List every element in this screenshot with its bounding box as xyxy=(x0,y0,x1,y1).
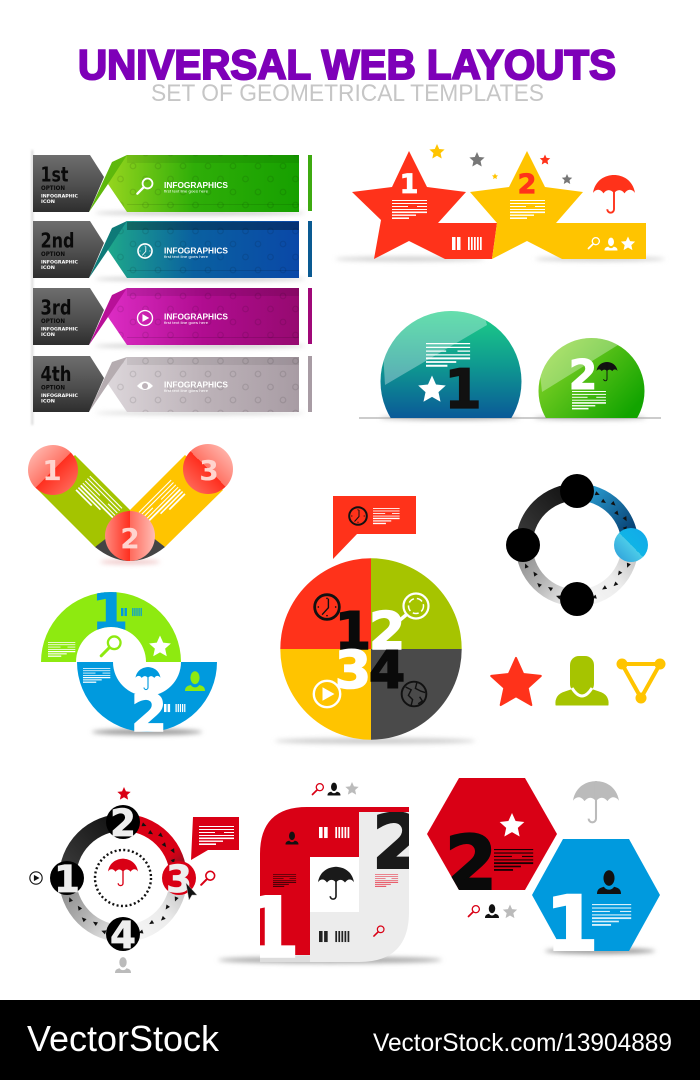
text lines dark xyxy=(494,849,533,871)
dome 1 xyxy=(380,311,522,418)
title: UNIVERSAL WEB LAYOUTS xyxy=(78,41,616,88)
icon: yellow triangle xyxy=(616,658,666,704)
icon: magnifier globe xyxy=(400,594,428,620)
text lines dark xyxy=(273,874,296,887)
red hexagon xyxy=(427,778,557,890)
banner: 4th option: first text line goes here xyxy=(164,389,208,393)
icon: star xyxy=(500,813,524,837)
banner: 3rd option xyxy=(33,288,312,348)
tiny star yellow xyxy=(492,173,498,179)
number 2: 2 xyxy=(369,602,405,662)
banner: 3rd option: ICON xyxy=(41,332,55,338)
banner: 3rd option: OPTION xyxy=(41,318,65,325)
icon: person xyxy=(286,832,298,844)
icon: globe xyxy=(402,682,426,706)
speech bubble xyxy=(333,496,416,559)
number 2: 2 xyxy=(372,798,424,886)
star 1 with ribbon xyxy=(352,151,497,259)
banner: 4th option: INFOGRAPHIC xyxy=(41,393,79,399)
node 2 xyxy=(106,805,140,839)
banner: 1st option: INFOGRAPHIC xyxy=(41,193,79,199)
node top xyxy=(560,474,594,508)
banner: 1st option: first text line goes here xyxy=(164,190,208,194)
node right xyxy=(614,528,648,562)
icon: magnifier xyxy=(201,871,215,885)
icon: star xyxy=(149,636,171,656)
node left xyxy=(506,528,540,562)
text lines yellow arm xyxy=(139,480,186,527)
banner: 4th option: 4th xyxy=(40,362,72,386)
small star dark grey xyxy=(562,174,572,184)
number 1: 1 xyxy=(54,858,80,901)
icon: play xyxy=(30,872,42,884)
grey L shape xyxy=(310,812,409,962)
dome 2 xyxy=(538,338,644,418)
banner: 1st option: ICON xyxy=(41,199,55,205)
banner: 2nd option xyxy=(33,221,312,281)
banner: 2nd option: INFOGRAPHICS xyxy=(164,246,229,256)
green half ring xyxy=(41,592,181,662)
barcode xyxy=(452,237,482,250)
banner: 3rd option: INFOGRAPHICS xyxy=(164,312,229,322)
circle 1 xyxy=(28,445,78,495)
quadrant dark xyxy=(371,649,462,740)
footer url: VectorStock.com/13904889 xyxy=(373,1029,672,1057)
banner: 1st option: INFOGRAPHICS xyxy=(164,181,229,190)
number 1: 1 xyxy=(546,879,598,968)
number 2: 2 xyxy=(120,522,140,555)
icon: magnifier xyxy=(374,926,384,936)
banner: 2nd option: 2nd xyxy=(40,228,74,252)
dotted circle xyxy=(95,850,151,906)
icon: umbrella red xyxy=(593,175,635,213)
banner: 4th option xyxy=(33,356,312,415)
banner: 2nd option: ICON xyxy=(41,265,55,271)
icon: star xyxy=(418,376,446,402)
node 4 xyxy=(106,917,140,951)
banner: 4th option: INFOGRAPHICS xyxy=(164,380,229,390)
footer bar xyxy=(0,1000,700,1080)
banner: 2nd option: INFOGRAPHIC xyxy=(41,259,79,265)
top icons xyxy=(312,782,359,796)
number 2: 2 xyxy=(445,819,497,907)
text lines star 1 xyxy=(392,200,427,219)
dark base wedge xyxy=(95,510,165,561)
speech bubble xyxy=(191,817,239,860)
text lines star 2 xyxy=(510,200,545,219)
arrows xyxy=(67,822,179,935)
panel: V layout xyxy=(28,444,233,564)
banner: 1st option: OPTION xyxy=(41,185,65,192)
icon: person xyxy=(115,957,131,973)
icon: star xyxy=(621,236,635,250)
barcode white xyxy=(319,827,349,838)
banner: 3rd option: INFOGRAPHIC xyxy=(41,326,79,332)
panel: numbered ring xyxy=(30,787,239,973)
subtitle: SET OF GEOMETRICAL TEMPLATES xyxy=(151,80,544,107)
panel: option banners xyxy=(32,150,312,425)
icon: eye xyxy=(137,382,153,390)
text lines dome 1 xyxy=(426,343,470,367)
panel: S half rings xyxy=(41,582,217,744)
icon: umbrella xyxy=(136,667,160,690)
banner: 2nd option: OPTION xyxy=(41,251,65,258)
green arm xyxy=(38,455,130,547)
icon: magnifier xyxy=(101,636,121,656)
icon: umbrella xyxy=(318,867,354,899)
blue half ring xyxy=(77,662,217,732)
hexagon icons row xyxy=(468,904,517,918)
banner: 3rd option: first text line goes here xyxy=(164,321,208,325)
barcode blue xyxy=(121,608,142,616)
number 4: 4 xyxy=(369,641,405,701)
icon: play xyxy=(314,681,340,707)
panel: pie chart xyxy=(275,496,475,744)
barcode white xyxy=(164,704,185,712)
barcode dark xyxy=(319,931,349,942)
quadrant green xyxy=(371,558,462,649)
text lines blue xyxy=(83,668,110,683)
footer logo: VectorStock xyxy=(27,1018,220,1059)
icon: umbrella black xyxy=(596,362,618,381)
banner: 1st option xyxy=(33,155,312,215)
number 1: 1 xyxy=(242,879,300,977)
number 3: 3 xyxy=(335,641,371,701)
text lines green xyxy=(48,642,75,657)
icon: umbrella xyxy=(108,859,138,886)
number 3: 3 xyxy=(199,454,219,487)
ring segments xyxy=(68,822,178,934)
banner: 1st option: 1st xyxy=(40,162,69,186)
small star grey xyxy=(469,152,485,166)
number 2: 2 xyxy=(518,169,536,200)
small star red xyxy=(540,154,550,164)
number 3: 3 xyxy=(166,858,192,901)
number 1: 1 xyxy=(400,169,418,200)
icon: clock xyxy=(315,595,339,619)
icon: umbrella grey xyxy=(573,781,619,822)
node 1 xyxy=(50,861,84,895)
number 1: 1 xyxy=(444,358,482,421)
number 1: 1 xyxy=(42,454,62,487)
node bottom xyxy=(560,582,594,616)
icon: large green person xyxy=(556,656,608,705)
circle 3 xyxy=(183,444,233,494)
icon: person xyxy=(604,238,618,250)
panel: hexagons xyxy=(427,778,660,968)
arrows xyxy=(523,491,631,600)
number 2: 2 xyxy=(569,351,597,399)
number 2: 2 xyxy=(110,802,136,845)
red L shape xyxy=(260,807,409,955)
icon: magnifier xyxy=(588,238,599,249)
icon: person xyxy=(185,671,205,691)
cursor xyxy=(186,883,197,900)
number 1: 1 xyxy=(92,582,128,642)
quadrant red xyxy=(280,558,371,649)
small star yellow xyxy=(429,144,445,158)
quadrant yellow xyxy=(280,649,371,740)
circle 2 xyxy=(105,511,155,561)
icon: star xyxy=(117,787,131,800)
banner: 2nd option: first text line goes here xyxy=(164,255,208,259)
text lines light xyxy=(592,904,631,926)
panel: dome layouts xyxy=(359,311,661,423)
base strip xyxy=(260,956,310,962)
icon: large red star xyxy=(491,658,541,705)
banner: 4th option: OPTION xyxy=(41,384,65,392)
number 1: 1 xyxy=(335,602,371,662)
number 2: 2 xyxy=(131,684,167,744)
banner: 4th option: ICON xyxy=(41,398,55,404)
star 2 with ribbon xyxy=(470,151,646,259)
banner: 3rd option: 3rd xyxy=(40,296,72,320)
text lines pink xyxy=(375,874,398,887)
panel: star layouts xyxy=(335,144,665,261)
panel: rounded square xyxy=(218,782,442,977)
text lines dome 2 xyxy=(572,391,606,409)
yellow arm xyxy=(130,455,223,547)
panel: cycle ring xyxy=(506,474,648,616)
text lines green arm xyxy=(75,476,122,523)
node 3 xyxy=(162,861,196,895)
blue hexagon xyxy=(532,839,660,951)
ring segments xyxy=(524,492,630,598)
number 4: 4 xyxy=(110,914,136,957)
icon: person xyxy=(597,870,621,894)
